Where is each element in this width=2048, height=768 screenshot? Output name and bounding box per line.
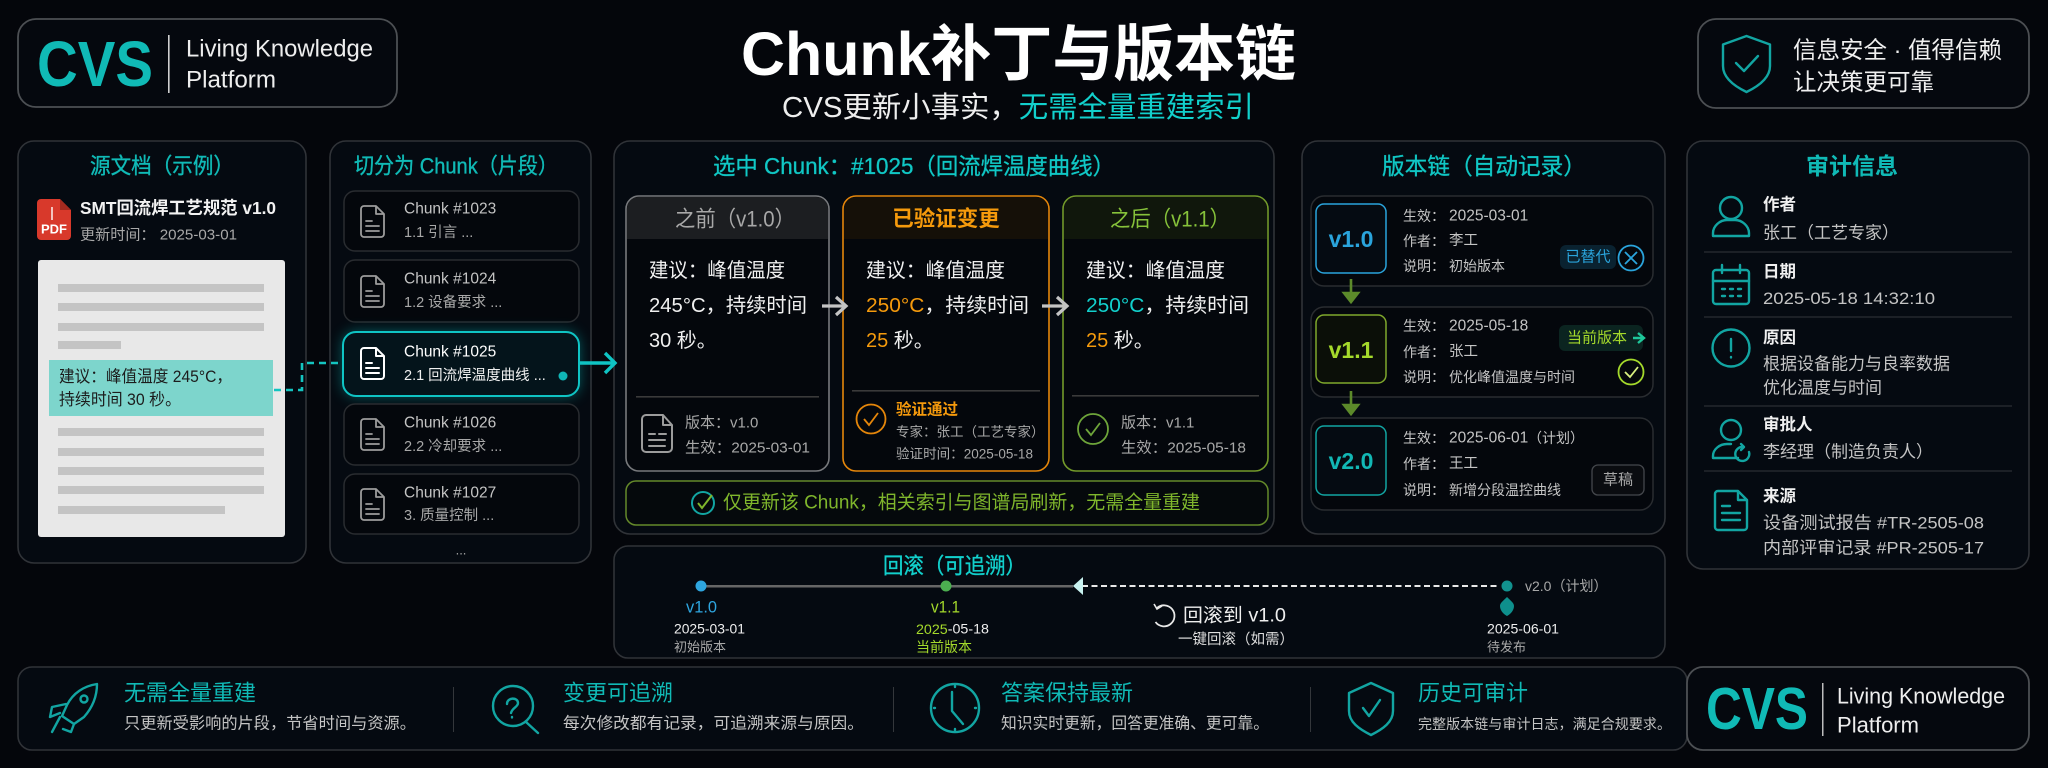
panel: selected chunk — [614, 141, 1274, 534]
heading: audit info: 审计信息 — [1806, 153, 1898, 179]
benefit: no full rebuild — [50, 680, 416, 732]
arrow: chunk to selected panel — [579, 353, 615, 373]
panel: version chain — [1302, 141, 1665, 534]
version v1.1: 张工 — [1449, 343, 1478, 360]
more chunks ellipsis: ... — [456, 542, 466, 558]
card: verified change: 验证时间：2025-05-18 — [896, 446, 1033, 462]
card: before: 30 秒。 — [649, 329, 717, 352]
milestone v2.0: v2.0（计划） — [1525, 578, 1607, 594]
version v1.0: 初始版本 — [1449, 258, 1505, 274]
audit: reason: 优化温度与时间 — [1763, 378, 1882, 398]
arrow: verified to after — [1042, 297, 1067, 315]
milestone v1.1 — [916, 598, 989, 655]
highlighted passage: 建议：峰值温度 245°C， — [59, 367, 232, 386]
chunk 1024: 1.2 设备要求 ... — [404, 294, 502, 311]
benefit: auditable history: 完整版本链与审计日志，满足合规要求。 — [1418, 716, 1671, 732]
audit: date — [1713, 262, 1935, 308]
version v2.0: 说明： — [1403, 482, 1445, 498]
milestone v1.0: v1.0 — [686, 598, 717, 616]
audit: approver: 李经理（制造负责人） — [1763, 442, 1933, 462]
chunk 1025 selected: 2.1 回流焊温度曲线 ... — [404, 367, 546, 384]
benefit: always current: 知识实时更新，回答更准确、更可靠。 — [1001, 714, 1269, 732]
audit: author: 作者 — [1763, 195, 1796, 214]
version v1.0: 2025-03-01 — [1449, 208, 1528, 224]
document page preview — [38, 260, 285, 537]
audit: author — [1713, 195, 1899, 242]
version v1.1: v1.1 — [1329, 337, 1374, 363]
arrow: before to verified — [822, 297, 846, 315]
logo: CVS top-left: Platform — [186, 66, 276, 94]
benefit: always current — [931, 680, 1269, 732]
card: before: 建议：峰值温度 — [649, 259, 785, 282]
chunk 1025 selected — [343, 332, 579, 396]
document name: SMT回流焊工艺规范 v1.0 — [80, 198, 276, 218]
milestone v1.1: 2025-05-18 — [916, 622, 989, 636]
milestone v1.0: 初始版本 — [674, 640, 726, 654]
audit: date: 日期 — [1763, 262, 1796, 281]
icon: shield check — [1723, 36, 1770, 92]
card: after: 版本：v1.1 — [1121, 414, 1194, 432]
version v1.0: 生效： — [1403, 208, 1445, 224]
audit: approver: 审批人 — [1763, 414, 1813, 434]
card: verified change: 25 秒。 — [866, 329, 934, 352]
chunk 1027: Chunk #1027 — [404, 484, 496, 502]
version v1.1: 说明： — [1403, 369, 1445, 385]
callout: security badge: 让决策更可靠 — [1793, 69, 1934, 95]
heading: version chain: 版本链（自动记录） — [1382, 153, 1586, 179]
audit: date: 2025-05-18 14:32:10 — [1763, 289, 1935, 308]
card: verified change: 250°C，持续时间 — [866, 294, 1029, 317]
banner: partial refresh note — [626, 481, 1268, 525]
benefit: always current: 答案保持最新 — [1001, 680, 1133, 706]
rollback action: 一键回滚（如需） — [1178, 631, 1294, 648]
version v2.0: （计划） — [1528, 430, 1584, 446]
rollback action: 回滚到 v1.0 — [1183, 604, 1286, 626]
rollback action — [1154, 604, 1294, 648]
card: before: 之前（v1.0） — [675, 206, 795, 232]
card: after: 25 秒。 — [1086, 329, 1154, 352]
audit: reason: 根据设备能力与良率数据 — [1763, 354, 1950, 374]
logo: CVS top-left: Living Knowledge — [186, 36, 373, 62]
chunk 1025 selected: Chunk #1025 — [404, 344, 496, 360]
icon: shield — [1349, 683, 1393, 735]
version v1.1: 作者： — [1403, 344, 1445, 360]
audit: author: 张工（工艺专家） — [1763, 224, 1899, 242]
milestone v1.0: 2025-03-01 — [674, 622, 745, 636]
version v2.0: 王工 — [1449, 456, 1478, 472]
audit: source — [1715, 486, 1984, 558]
version v2.0: 作者： — [1403, 456, 1445, 472]
version v1.1 — [1311, 307, 1653, 397]
chunk 1023: Chunk #1023 — [404, 200, 496, 218]
version v1.0 — [1311, 196, 1653, 286]
version v1.1: 生效： — [1403, 318, 1445, 334]
version v2.0: 2025-06-01 — [1449, 430, 1528, 446]
heading: chunks: 切分为 Chunk（片段） — [354, 154, 558, 178]
version v1.1: 当前版本 — [1567, 330, 1627, 346]
card: after — [1063, 196, 1268, 471]
milestone v2.0: 待发布 — [1487, 640, 1526, 654]
arrow: v1.1 to v2.0 — [1344, 391, 1358, 414]
chunk 1026: 2.2 冷却要求 ... — [404, 438, 502, 455]
milestone v1.1: v1.1 — [931, 598, 960, 616]
update date: 更新时间： 2025-03-01 — [80, 226, 237, 244]
audit: source: 设备测试报告 #TR-2505-08 — [1763, 514, 1984, 532]
version v2.0: 草稿 — [1603, 472, 1633, 488]
version v1.1: 优化峰值温度与时间 — [1449, 369, 1575, 385]
card: verified change — [843, 196, 1049, 471]
arrow: dashed connector passage to chunk — [274, 363, 342, 390]
arrow: v1.0 to v1.1 — [1344, 279, 1358, 302]
benefit: traceable change — [493, 680, 864, 733]
audit: reason — [1712, 329, 1950, 398]
version v2.0: 生效： — [1403, 430, 1445, 446]
panel: chunks — [330, 141, 591, 563]
audit: source: 来源 — [1763, 486, 1796, 506]
banner: partial refresh note: 仅更新该 Chunk，相关索引与图谱局刷新，无需全量重建 — [723, 492, 1200, 514]
card: before: 生效：2025-03-01 — [685, 440, 810, 456]
icon: PDF file — [37, 199, 71, 240]
panel: benefits strip — [18, 667, 1687, 750]
card: verified change: 验证通过 — [896, 400, 959, 418]
chunk 1026 — [344, 404, 579, 465]
chunk 1023 — [344, 191, 579, 251]
subtitle: CVS更新小事实，无需全量重建索引 — [782, 91, 1254, 124]
card: before: 版本：v1.0 — [685, 414, 758, 432]
card: after: 250°C，持续时间 — [1086, 294, 1249, 317]
version v1.0: 作者： — [1403, 233, 1445, 249]
logo: CVS top-left: CVS — [37, 28, 153, 100]
version v1.0: v1.0 — [1329, 226, 1373, 252]
version v2.0: v2.0 — [1329, 448, 1373, 474]
audit: approver — [1713, 414, 1933, 462]
audit: reason: 原因 — [1763, 329, 1796, 347]
version v1.0: 李工 — [1449, 232, 1478, 249]
benefit: traceable change: 每次修改都有记录，可追溯来源与原因。 — [563, 714, 864, 732]
chunk 1027 — [344, 474, 579, 534]
card: after: 生效：2025-05-18 — [1121, 440, 1246, 456]
logo: CVS top-left — [18, 19, 397, 107]
panel: rollback timeline — [614, 546, 1665, 658]
chunk 1024: Chunk #1024 — [404, 270, 497, 288]
audit: source: 内部评审记录 #PR-2505-17 — [1763, 538, 1984, 558]
version v1.0: 说明： — [1403, 258, 1445, 274]
chunk 1024 — [344, 260, 579, 322]
heading: selected chunk: 选中 Chunk：#1025（回流焊温度曲线） — [713, 153, 1115, 179]
timeline track — [696, 577, 1512, 595]
version v1.0: 已替代 — [1565, 248, 1611, 266]
icon: magnifier question — [493, 686, 538, 733]
chunk 1023: 1.1 引言 ... — [404, 224, 473, 241]
milestone v2.0: 2025-06-01 — [1487, 622, 1559, 636]
icon: clock — [931, 684, 979, 732]
benefit: auditable history — [1349, 680, 1671, 735]
benefit: no full rebuild: 只更新受影响的片段，节省时间与资源。 — [124, 714, 416, 732]
benefit: traceable change: 变更可追溯 — [563, 680, 673, 706]
card: before: 245°C，持续时间 — [649, 294, 807, 317]
benefit: no full rebuild: 无需全量重建 — [124, 680, 256, 706]
card: verified change: 建议：峰值温度 — [866, 259, 1005, 282]
callout: security badge: 信息安全 · 值得信赖 — [1793, 37, 2002, 63]
version v2.0: 新增分段温控曲线 — [1449, 482, 1561, 498]
icon: rocket — [50, 684, 97, 732]
logo: CVS bottom-right — [1687, 667, 2029, 750]
panel: audit info — [1687, 141, 2029, 569]
card: after: 建议：峰值温度 — [1086, 259, 1225, 282]
card: after: 之后（v1.1） — [1110, 206, 1230, 232]
chunk 1026: Chunk #1026 — [404, 414, 496, 432]
logo: CVS bottom-right: Platform — [1837, 712, 1919, 738]
card: before — [626, 196, 829, 471]
logo: CVS bottom-right: CVS — [1706, 676, 1808, 742]
title: Chunk补丁与版本链 — [741, 20, 1296, 88]
version v1.1: 2025-05-18 — [1449, 318, 1528, 334]
version v2.0 — [1311, 418, 1653, 510]
panel: source document — [18, 141, 306, 563]
milestone v2.0 — [1487, 578, 1607, 654]
heading: source document: 源文档（示例） — [90, 154, 234, 178]
icon: PDF file: PDF — [41, 222, 67, 236]
card: verified change: 已验证变更 — [892, 206, 1000, 231]
card: verified change: 专家：张工（工艺专家） — [896, 424, 1044, 440]
highlighted passage — [49, 360, 273, 416]
heading: rollback: 回滚（可追溯） — [883, 554, 1026, 578]
chunk 1027: 3. 质量控制 ... — [404, 507, 494, 524]
highlighted passage: 持续时间 30 秒。 — [59, 390, 181, 409]
callout: security badge — [1698, 19, 2029, 108]
benefit: auditable history: 历史可审计 — [1418, 680, 1528, 706]
milestone v1.1: 当前版本 — [916, 639, 972, 655]
milestone v1.0 — [674, 598, 745, 654]
logo: CVS bottom-right: Living Knowledge — [1837, 684, 2005, 708]
